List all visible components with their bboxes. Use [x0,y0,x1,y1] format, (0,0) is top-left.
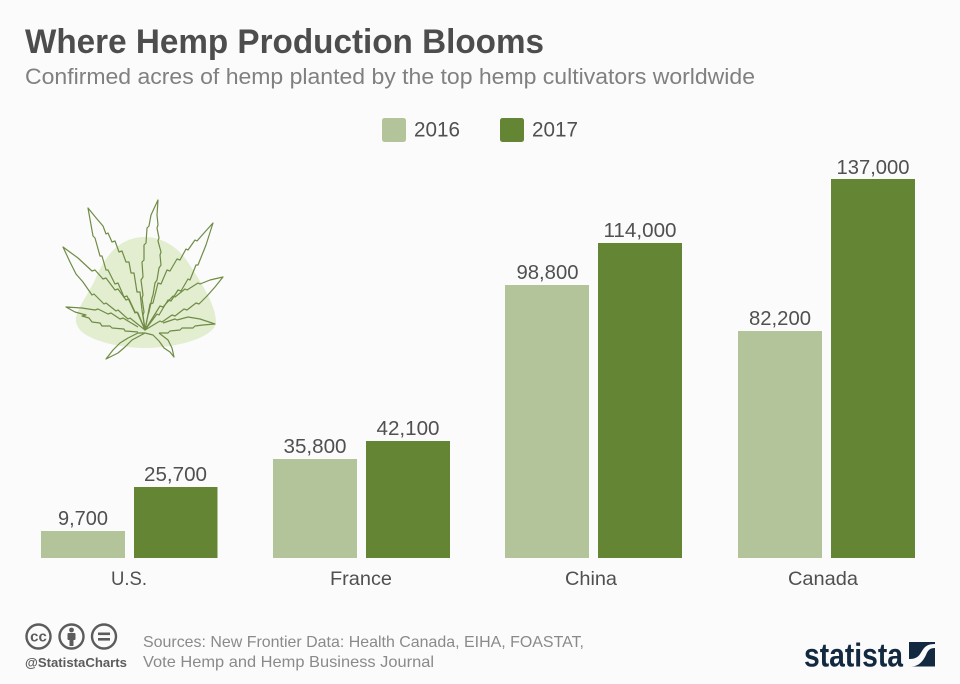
group: China: China [565,568,617,590]
group: U.S.: 25,700 [144,464,207,486]
group: U.S. [41,464,218,590]
legend item: 2016: 2016 [414,118,460,142]
sources [143,634,584,671]
group: France: 35,800 [284,436,346,458]
legend item: 2017: 2017 [532,118,578,142]
statista logo: statista [804,636,904,674]
group: France [273,418,450,590]
handle: @StatistaCharts [25,656,127,670]
legend item: 2017 [500,118,578,142]
icon: cc license [26,624,116,648]
sources: Vote Hemp and Hemp Business Journal [143,654,434,671]
group: Canada: 82,200 [749,308,811,330]
icon: attribution [60,624,84,648]
legend [382,118,578,142]
group: China: 98,800 [516,262,578,284]
icon: cc: cc [30,628,47,646]
sources: Sources: New Frontier Data: Health Canada, EIHA, FOASTAT, [143,634,584,651]
subtitle: Confirmed acres of hemp planted by the top hemp cultivators worldwide [25,64,755,89]
group: Canada: Canada [788,568,858,590]
icon: hemp leaf [63,200,223,359]
group: U.S.: 9,700 [58,508,108,530]
legend item: 2016 [382,118,460,142]
group: China: 114,000 [604,220,676,242]
group: France: 42,100 [376,418,440,440]
title: Where Hemp Production Blooms [25,23,544,61]
group: Canada: 137,000 [836,157,910,179]
group: China [505,220,682,590]
bar chart [41,157,915,590]
icon: no derivatives [92,624,116,648]
group: Canada [738,157,915,590]
group: France: France [330,568,392,590]
group: U.S.: U.S. [111,568,147,590]
